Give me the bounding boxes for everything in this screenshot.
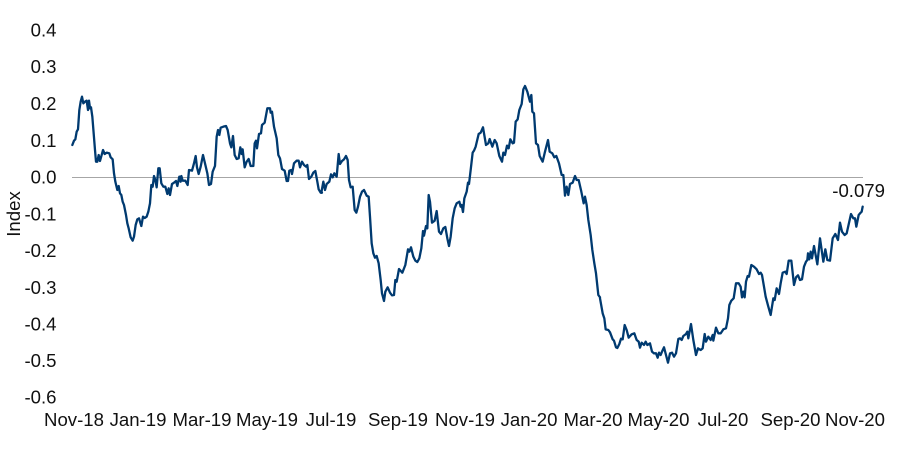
y axis title: Index: [3, 191, 24, 237]
x axis tick labels: [44, 409, 885, 430]
x axis tick labels: Nov-20: [825, 409, 885, 430]
x axis tick labels: Mar-19: [173, 409, 231, 430]
y axis tick labels: -0.4: [24, 314, 56, 334]
zero line: [72, 176, 863, 178]
x axis tick labels: Sep-20: [761, 409, 820, 430]
x axis tick labels: Nov-19: [435, 409, 495, 430]
x axis tick labels: Sep-19: [368, 409, 428, 430]
y axis tick labels: [24, 20, 56, 408]
y axis tick labels: 0.3: [31, 56, 56, 77]
x axis tick labels: May-20: [627, 409, 690, 430]
last value label: -0.079: [832, 180, 885, 201]
x axis tick labels: May-19: [236, 409, 298, 430]
y axis tick labels: 0.0: [31, 166, 56, 188]
y axis tick labels: -0.5: [24, 350, 56, 371]
data series line: [72, 86, 863, 363]
y axis tick labels: 0.4: [31, 20, 56, 40]
x axis tick labels: Jan-19: [110, 409, 166, 430]
x axis tick labels: Jul-20: [698, 409, 748, 430]
x axis tick labels: Mar-20: [564, 409, 622, 430]
y axis tick labels: 0.2: [31, 93, 56, 114]
y axis tick labels: -0.6: [24, 386, 56, 408]
y axis tick labels: -0.2: [24, 240, 56, 261]
y axis tick labels: -0.1: [24, 204, 56, 224]
y axis tick labels: 0.1: [31, 130, 56, 151]
x axis tick labels: Jan-20: [501, 409, 557, 430]
x axis tick labels: Nov-18: [44, 409, 104, 430]
x axis tick labels: Jul-19: [306, 409, 356, 430]
y axis tick labels: -0.3: [24, 277, 56, 298]
